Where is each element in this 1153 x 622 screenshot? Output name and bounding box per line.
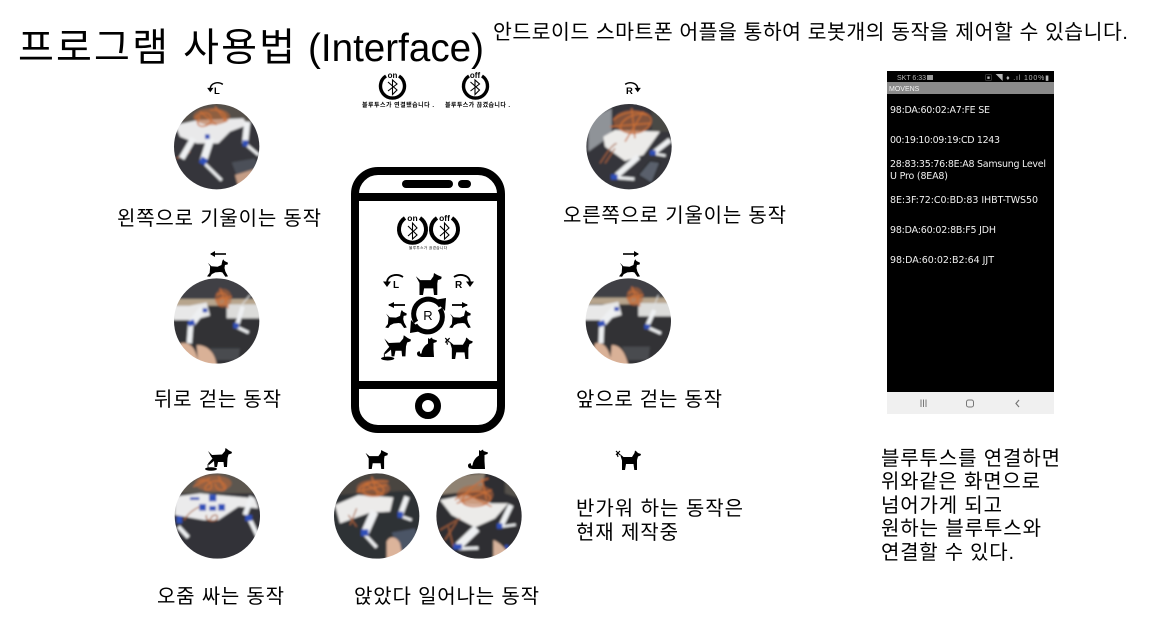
icon: tilt right arrow [625,83,641,97]
icon: app wave [445,338,473,359]
title: (Interface) [308,27,484,70]
icon: bluetooth on [381,71,405,98]
device list: 8E:3F:72:C0:BD:83 IHBT-TWS50 [890,195,1038,206]
status text: connected: 블루투스가 연결됐습니다 . [362,101,434,109]
photo: robot tilting left [174,104,260,190]
bluetooth instructions text: 블루투스를 연결하면 [881,447,1060,470]
label: 앉았다 일어나는 동작 [354,585,539,608]
icon: app tilt left: L [393,280,399,291]
panel: phone with app controls [355,171,501,429]
navigation bar [887,392,1054,414]
icon: sitting dog [468,450,488,469]
photo: robot standing [332,470,422,560]
icon: peeing dog [205,448,232,471]
app status text: 블루투스가 끊겼습니다 [409,245,448,250]
icon: bluetooth on: on [388,71,397,80]
device list: 98:DA:60:02:8B:F5 JDH [890,225,996,236]
phone body [355,171,501,429]
device list: 98:DA:60:02:A7:FE SE [890,105,990,116]
device list: 00:19:10:09:19:CD 1243 [890,135,1000,146]
icon: app bluetooth on [399,213,426,243]
title [18,27,484,70]
status bar [897,74,1049,82]
icon: app tilt right: R [455,280,463,291]
note text [576,497,743,544]
bluetooth instructions text: 위와같은 화면으로 [881,470,1040,493]
label: 앞으로 걷는 동작 [576,388,722,411]
intro text: 안드로이드 스마트폰 어플을 통하여 로봇개의 동작을 제어할 수 있습니다. [493,21,1128,44]
status bar: SKT 6:33 [897,75,926,82]
icon: bluetooth off [464,71,488,98]
bluetooth instructions text: 원하는 블루투스와 [881,517,1041,540]
icon: bluetooth off: off [470,71,480,80]
photo: robot sitting [435,470,525,560]
icon: app pee [381,335,411,360]
bluetooth instructions text [881,447,1060,564]
app header bar [887,82,1054,94]
photo: robot walking forward [586,278,671,364]
icon: app forward [449,302,471,328]
icon: app sit [417,338,437,357]
icon: app bluetooth on: on [407,213,418,223]
panel: pee motion [157,448,284,608]
bluetooth instructions text: 연결할 수 있다. [881,541,1014,564]
device list: 28:83:35:76:8E:A8 Samsung Level [890,159,1046,170]
panel: walk backward [154,251,281,411]
panel: bluetooth device list screenshot [887,71,1054,414]
bluetooth instructions text: 넘어가게 되고 [881,494,1002,517]
app header bar: MOVENS [889,86,920,93]
photo: robot peeing [173,470,263,560]
icon: tilt right arrow: R [626,86,633,97]
panel: tilt left [117,83,321,230]
icon: walk forward [619,251,640,277]
screen background [887,71,1054,392]
panel: bluetooth status icons [362,71,510,109]
icon: waving dog [616,450,641,470]
icon: standing dog [366,450,388,469]
panel: sit and stand [332,450,539,608]
icon: walk backward [207,251,228,277]
icon: app tilt right [454,275,474,291]
label: 오른쪽으로 기울이는 동작 [563,204,786,227]
icon: app bluetooth off [431,213,458,243]
icon: tilt left arrow: L [214,86,220,97]
icon: app backward [385,302,407,328]
icon: tilt left arrow [207,83,223,97]
panel: tilt right [563,83,786,227]
status text: disconnected: 블루투스가 끊겼습니다 . [445,101,510,109]
note text: 현재 제작중 [576,521,678,544]
icon: app standing dog [416,273,442,295]
label: 오줌 싸는 동작 [157,585,284,608]
status bar: ▣ ◥ ♦ .ıl 100%▮ [985,74,1049,82]
device list [890,105,1046,266]
note text: 반가워 하는 동작은 [576,497,743,520]
photo: robot walking backward [174,278,260,364]
title: 프로그램 사용법 [18,27,295,70]
device list: U Pro (8EA8) [890,171,948,182]
label: 왼쪽으로 기울이는 동작 [117,207,321,230]
icon: app tilt left [383,275,403,291]
icon: app reset: R [423,308,433,323]
device list: 98:DA:60:02:B2:64 JJT [890,255,994,266]
label: 뒤로 걷는 동작 [154,388,281,411]
icon: app reset [410,298,446,333]
panel: walk forward [576,251,722,411]
panel: greeting motion [576,450,743,544]
icon: app bluetooth off: off [439,213,450,223]
photo: robot tilting right [585,102,675,192]
